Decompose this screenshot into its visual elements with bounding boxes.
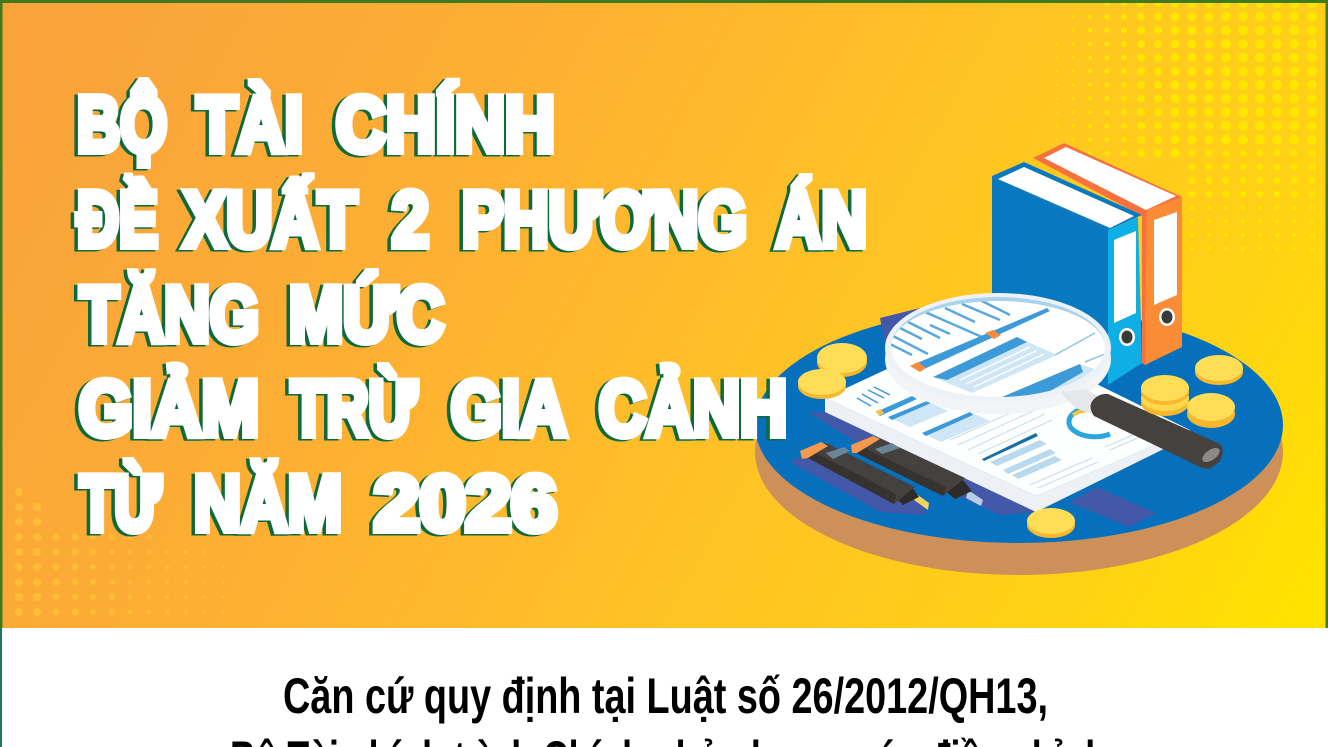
title: TĂNG	[80, 270, 259, 358]
shadows on table	[790, 308, 1156, 527]
title: TÀI	[197, 80, 303, 168]
icon: marker pen right	[851, 436, 983, 506]
table top	[755, 307, 1283, 543]
halftone dots bottom left	[19, 492, 223, 627]
icon: marker pen left	[800, 442, 929, 510]
title: MỨC	[289, 270, 444, 358]
title: XUẤT	[184, 175, 357, 263]
title: BỘ	[77, 80, 167, 168]
intro text: Căn cứ quy định tại Luật số 26/2012/QH13,	[283, 668, 1048, 724]
title: GIA	[451, 364, 567, 452]
halftone dots top right	[1057, 3, 1312, 250]
icon: blue binder	[992, 162, 1142, 387]
icon: gold coins	[798, 343, 1243, 538]
title: ĐỀ	[77, 175, 158, 263]
icon: report sheet	[825, 326, 1190, 512]
icon: magnifying glass	[885, 293, 1111, 415]
title: CHÍNH	[336, 80, 555, 168]
title: GIẢM	[79, 364, 259, 452]
title: CẢNH	[599, 364, 787, 452]
intro text	[230, 668, 1107, 747]
title: TRỪ	[291, 364, 417, 452]
title: 2026	[374, 459, 557, 547]
title	[77, 80, 867, 547]
icon: magnifier handle	[1090, 394, 1223, 469]
title: 2	[392, 175, 429, 263]
panel border left	[0, 628, 2, 747]
icon: donut chart	[1069, 407, 1113, 437]
title: ÁN	[776, 175, 867, 263]
icon: orange binder	[1033, 143, 1182, 365]
title: PHƯƠNG	[462, 175, 747, 263]
title: NĂM	[194, 459, 342, 547]
table base	[755, 329, 1283, 575]
illustration: documents on round table	[755, 143, 1283, 575]
title: TỪ	[80, 459, 161, 547]
